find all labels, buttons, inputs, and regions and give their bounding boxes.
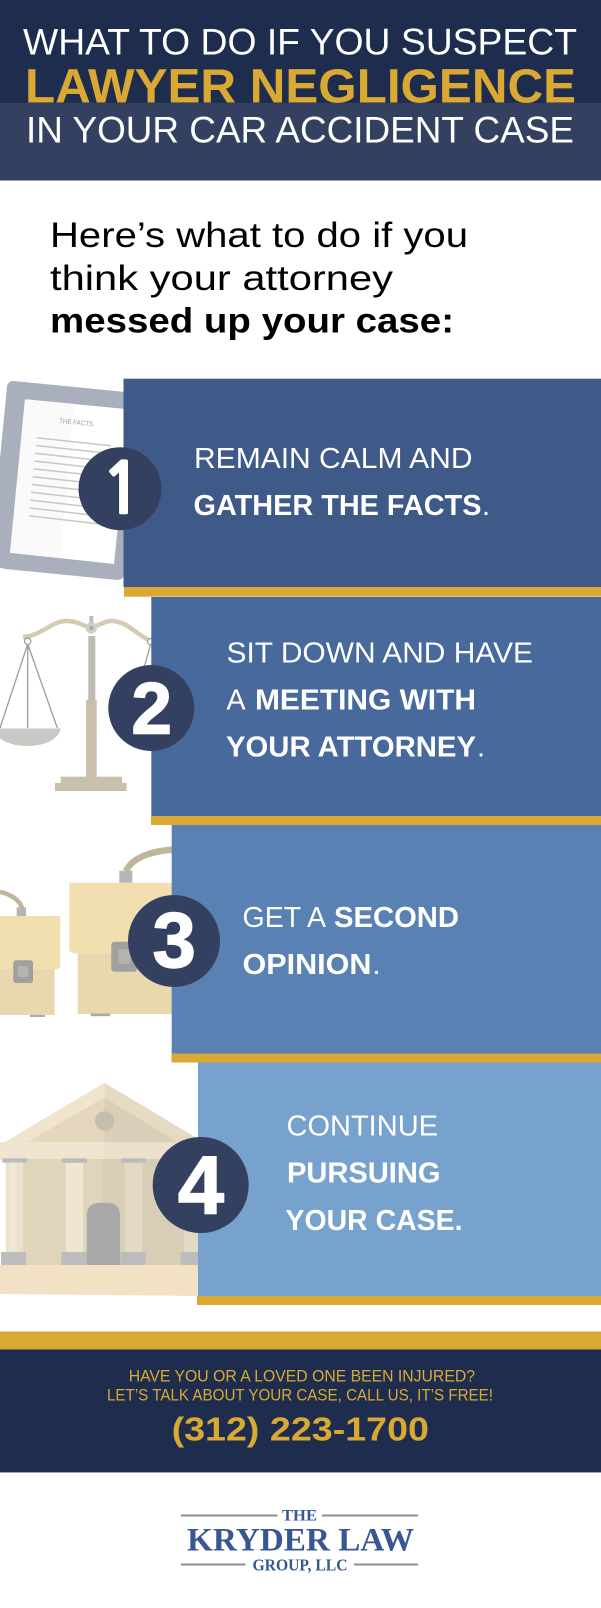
call to action text: HAVE YOU OR A LOVED ONE BEEN INJURED?: [129, 1367, 475, 1386]
step 2 text: A: [226, 684, 246, 716]
number 4 badge: [153, 1137, 249, 1233]
icon: scales of justice: [0, 616, 154, 791]
step 4 text: [286, 1111, 462, 1237]
panel: step 4: [153, 1062, 601, 1305]
column bases: [1, 1252, 200, 1265]
call to action text line 2: LET’S TALK ABOUT YOUR CASE, CALL US, IT’S FREE!: [107, 1385, 493, 1404]
step 1 text: GATHER THE FACTS: [194, 490, 482, 522]
number 4 badge: 4: [178, 1138, 224, 1232]
step 3 text: SECOND: [334, 902, 459, 934]
step 4 text: CONTINUE: [286, 1111, 438, 1143]
intro text: [50, 215, 468, 340]
number 2 badge: [108, 665, 194, 751]
icon: large briefcase: [69, 850, 178, 1016]
step 2 text: .: [477, 732, 485, 764]
step 1 text: [194, 443, 490, 522]
step 2 text: MEETING WITH: [255, 684, 476, 716]
icon: courthouse: [0, 1083, 200, 1296]
number 3 badge: [128, 895, 220, 987]
panel: step 1: [78, 379, 601, 597]
number 2 badge: 2: [131, 668, 172, 750]
step 2 text: YOUR ATTORNEY: [226, 732, 476, 764]
number 3 badge: 3: [153, 896, 196, 984]
step 1 text: .: [482, 490, 490, 522]
step 3 text: OPINION: [242, 949, 372, 981]
title line 1: WHAT TO DO IF YOU SUSPECT: [23, 22, 577, 62]
phone number: (312) 223-1700: [172, 1412, 429, 1449]
intro text: think your attorney: [50, 258, 393, 298]
logo: The Kryder Law Group, LLC: GROUP, LLC: [252, 1556, 348, 1575]
title line 2: LAWYER NEGLIGENCE: [25, 60, 576, 114]
step 2 text: [226, 638, 533, 764]
logo: The Kryder Law Group, LLC: THE: [282, 1508, 317, 1525]
icon: small briefcase: [0, 892, 60, 1017]
step 3 text: GET A: [242, 902, 327, 934]
header banner: [0, 0, 601, 181]
panel: step 2: [108, 597, 601, 825]
intro text: Here’s what to do if you: [50, 215, 468, 255]
door: [87, 1203, 120, 1265]
icon: tablet with the facts: THE FACTS: [59, 418, 94, 428]
number 1 badge: 1: [101, 456, 143, 524]
step 4 text: YOUR CASE.: [286, 1205, 462, 1237]
step 3 text: [242, 902, 459, 981]
step 3 text: .: [372, 949, 381, 981]
columns: [6, 1163, 200, 1253]
title line 3: IN YOUR CAR ACCIDENT CASE: [26, 110, 574, 150]
intro text: messed up your case:: [50, 300, 454, 340]
icon: tablet with the facts: [0, 387, 135, 574]
logo: The Kryder Law Group, LLC: KRYDER LAW: [187, 1523, 414, 1559]
steps: [0, 1265, 200, 1296]
column capitals: [2, 1158, 146, 1163]
step 4 text: PURSUING: [287, 1158, 440, 1190]
panel: step 3: [128, 825, 601, 1062]
step 2 text: SIT DOWN AND HAVE: [226, 638, 533, 670]
logo: The Kryder Law Group, LLC: [181, 1508, 418, 1575]
number 1 badge: [78, 447, 162, 530]
step 1 text: REMAIN CALM AND: [194, 443, 472, 475]
call to action footer: [0, 1332, 601, 1473]
